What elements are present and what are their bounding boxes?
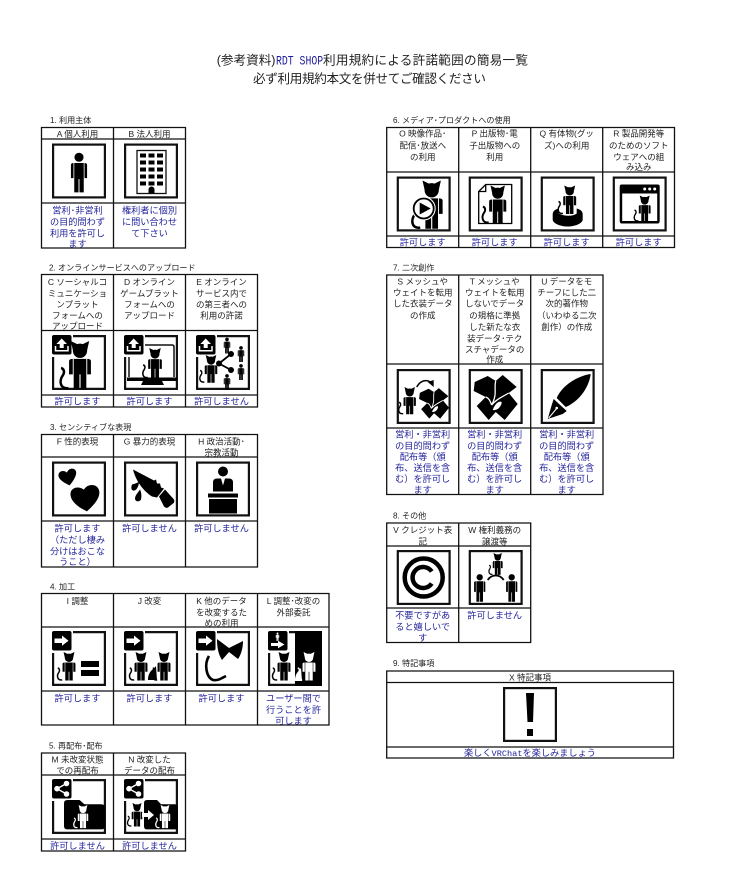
cell I: 許可します [55,692,100,704]
heading: 1. 利用主体 [50,115,91,125]
cell R [609,128,668,248]
cell C: C ソーシャルコ [48,277,107,287]
cell W [467,525,522,620]
cell O [398,128,450,248]
heading: 7. 二次創作 [393,262,434,272]
cell T: T メッシュや [470,276,520,286]
cell J [124,596,177,704]
icon: outsourced modification [268,631,322,686]
cell C: フォームへの [52,310,103,320]
cell W: 譲渡等 [482,536,508,546]
cell L: 可します [275,716,312,726]
cell N: データの配布 [124,766,175,776]
cell F [50,436,105,567]
cell P: P 出版物･電 [472,128,518,138]
icon: physical goods [542,178,594,230]
cell F: F 性的表現 [57,436,99,446]
cell H: 許可しません [194,522,249,534]
icon: publication [470,178,522,230]
cell F: うこと） [59,557,96,567]
cell F: （ただし棲み [50,534,105,545]
cell D: D オンライン [124,277,175,287]
cell P: 許可します [472,236,518,248]
cell B: B 法人利用 [128,129,171,139]
cell D: 許可します [127,396,172,406]
heading: 9. 特記事項 [393,658,434,668]
icon: distribute modified data [124,779,178,833]
heading: 3. センシティブな表現 [50,422,131,432]
cell T: 配布等（頒 [472,451,518,462]
cell T: の規格に準拠 [469,310,521,320]
icon: video [398,178,450,230]
cell L: 外部委託 [276,608,311,618]
icon: exclamation [504,688,556,741]
cell B: て下さい [131,228,168,238]
cell R: 許可します [616,236,662,248]
cell E: 利用の許諾 [200,310,243,320]
cell E: 許可しません [194,396,249,406]
cell A: ます [68,239,87,249]
cell T: した新たな衣 [469,322,521,332]
icon: copyright [398,551,450,604]
cell T: 作成 [486,354,504,364]
cell U: U データをモ [541,276,592,286]
heading: 6. メディア･プロダクトへの使用 [393,115,511,125]
cell B: に問い合わせ [122,216,177,227]
cell U [537,276,597,495]
cell F: 許可します [55,522,100,534]
cell L [266,596,322,726]
cell U: 布、送信を含 [539,462,594,473]
cell V: 不要ですがあ [395,610,450,620]
icon: office building [125,145,177,197]
panel: 1. 利用主体 [42,115,186,249]
cell S: 配布等（頒 [400,451,446,462]
cell U: ます [558,485,576,495]
cell T: しないでデータ [465,298,524,308]
icon: knife [125,463,177,515]
cell C: ンプラット [56,300,99,310]
icon: speaker at podium [197,463,249,515]
cell P: 利用 [486,152,503,162]
cell R: R 製品開発等 [613,128,665,138]
cell F: 分けはおこな [50,546,105,556]
cell N [122,754,178,851]
heading: 5. 再配布･配布 [49,740,103,750]
cell H [194,436,249,534]
cell T: ます [486,485,504,495]
cell J: 許可します [127,692,172,704]
cell K: 許可します [199,692,244,704]
cell A: の目的問わず [50,216,105,227]
heading: 4. 加工 [50,582,75,592]
cell K: めの利用 [204,618,239,628]
cell D: フォームへの [124,300,175,310]
cell U: （いわゆる二次 [537,310,597,320]
title [217,52,528,86]
cell L: L 調整･改変の [267,596,320,606]
cell D: アップロード [124,310,175,320]
panel: 2. オンラインサービスへのアップロード [42,264,258,407]
heading: 2. オンラインサービスへのアップロード [49,264,196,272]
cell C: ミュニケーショ [48,288,107,298]
cell U: 創作）の作成 [541,322,593,332]
cell E: E オンライン [196,277,247,287]
cell R: ウェアへの組 [613,152,665,162]
panel: 4. 加工 [42,582,329,726]
cell S: 営利・非営利 [395,428,450,440]
cell V: 記 [418,536,427,546]
cell E: サービス内で [196,288,247,298]
cell B [122,129,177,238]
cell A: 利用を許可し [50,228,105,238]
cell S: む）を許可し [395,473,450,484]
cell T: む）を許可し [467,473,522,484]
cell C: アップロード [52,321,103,331]
title: RDT SHOP [276,56,323,69]
cell M: 許可しません [50,840,105,851]
cell C [48,277,107,406]
cell O: の利用 [410,152,435,162]
cell M: M 未改変状態 [52,754,104,764]
cell S: 布、送信を含 [395,462,450,473]
cell E [194,277,249,406]
cell V: V クレジット表 [393,525,453,535]
icon: ears and tail parts [196,631,249,685]
cell U: チーフにした二 [537,288,597,298]
cell T: スチャデータの [465,344,524,354]
icon: upload cat [52,335,105,389]
cell P [469,128,522,248]
icon: modify [124,631,177,685]
cell I [52,596,105,704]
cell L: 行うことを許 [266,704,321,715]
title: 必ず利用規約本文を併せてご確認ください [253,71,486,86]
icon: transfer of rights [470,551,522,604]
panel: 3. センシティブな表現 [42,422,258,567]
cell G [122,436,177,534]
cell R: のためのソフト [609,140,668,150]
cell G: 許可しません [122,522,177,534]
cell Q: Q 有体物(グッ [540,128,594,138]
cell T: 布、送信を含 [467,462,522,473]
cell A [50,129,105,249]
cell A: A 個人利用 [57,129,98,139]
cell K: K 他のデータ [196,596,247,606]
note text: 楽しくVRChatを楽しみましょう [464,747,596,759]
cell T: 装データ･テク [467,334,522,344]
cell S [393,276,452,495]
cell S: の作成 [410,310,436,320]
icon: hearts [53,463,105,515]
panel: 5. 再配布・配布 [42,740,186,851]
cell U: の目的問わず [539,440,594,451]
cell T: ウェイトを転用 [465,288,524,298]
cell Q: 許可します [544,236,590,248]
cell T [465,276,524,495]
panel: 7. 二次創作 [387,262,603,495]
heading: 8. その他 [393,510,426,520]
cell T: 営利・非営利 [467,428,522,440]
panel: 9. 特記事項: X 特記事項 [509,672,552,682]
cell N: 許可しません [122,840,177,851]
icon: redistribute folder [52,779,105,833]
cell U: 配布等（頒 [544,451,590,462]
cell M: での再配布 [56,766,99,776]
cell O: 許可します [400,236,446,248]
cell E: の第三者への [196,300,247,310]
cell W: 許可しません [467,610,522,620]
cell H: 宗教活動 [204,448,239,458]
panel: 8. その他 [387,510,531,643]
cell N: N 改変した [128,754,171,764]
icon: person [53,145,105,197]
cell C: 許可します [55,396,100,406]
cell Q: ズ)への利用 [544,140,589,150]
panel: 6. メディア・プロダクトへの使用 [387,115,674,248]
cell O: 配信･放送へ [399,140,447,150]
cell S: ウェイトを転用 [393,288,452,298]
cell D [120,277,179,406]
cell H: H 政治活動･ [198,436,245,446]
cell V: ると嬉しいで [395,621,450,632]
cell U: 営利・非営利 [539,428,594,440]
cell S: ます [414,485,432,495]
icon: new costume [470,370,522,423]
cell G: G 暴力的表現 [124,436,176,446]
icon: upload to game platform [124,335,177,389]
icon: licensing to third parties [196,335,249,390]
cell P: 子出版物への [469,140,520,150]
cell S: した衣装データ [393,298,452,308]
cell M [50,754,105,851]
icon: fountain pen [542,370,594,423]
cell I: I 調整 [67,596,89,606]
panel: 9. 特記事項 [387,658,674,759]
cell S: の目的問わず [395,440,450,451]
cell V [393,525,453,643]
cell O: O 映像作品･ [399,128,446,138]
cell T: の目的問わず [467,440,522,451]
cell D: ゲームプラット [120,288,179,298]
cell J: J 改変 [138,596,162,606]
cell A: 営利･非営利 [52,204,103,216]
cell V: す [418,633,427,643]
icon: software window [614,178,666,230]
cell K: を改変するた [196,608,247,618]
icon: adjust [52,631,105,685]
cell S: S メッシュや [397,276,448,286]
cell Q [540,128,594,248]
title: 利用規約による許諾範囲の簡易一覧 [323,52,528,68]
cell U: む）を許可し [539,473,594,484]
cell L: ユーザー間で [266,694,321,704]
cell U: 次的著作物 [545,298,588,308]
cell R: み込み [626,162,652,172]
cell W: W 権利義務の [468,525,521,535]
cell K [196,596,249,704]
icon: derived costume [398,370,450,423]
cell B: 権利者に個別 [122,204,177,216]
title: (参考資料) [217,54,276,68]
